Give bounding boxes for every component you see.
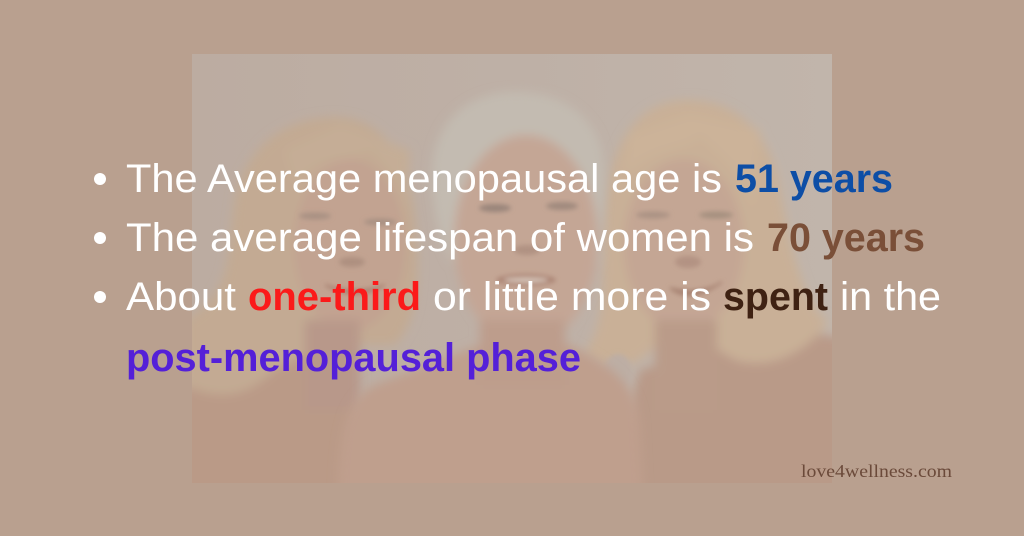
bullet 2: The average lifespan of women is: [126, 216, 754, 260]
bullet 3 continuation: post-menopausal phase: [126, 336, 581, 380]
bullet 3: spent: [723, 275, 828, 319]
bullet 1: The Average menopausal age is: [126, 157, 722, 201]
bullet 2: 70 years: [767, 216, 925, 260]
woman left: [192, 117, 418, 483]
gap behind hair: [610, 356, 626, 364]
bullet 3: one-third: [248, 275, 421, 319]
bullet 3: or little more is: [433, 275, 711, 319]
website credit: love4wellness.com: [801, 461, 952, 481]
bullet 3: [94, 275, 941, 319]
bullet 1: 51 years: [735, 157, 893, 201]
woman right: [588, 100, 832, 483]
photo: three women: [192, 54, 832, 483]
bullet 3: in the: [840, 275, 941, 319]
bullet 3: About: [126, 275, 236, 319]
woman middle: [352, 96, 632, 483]
bullet list: [94, 157, 941, 380]
